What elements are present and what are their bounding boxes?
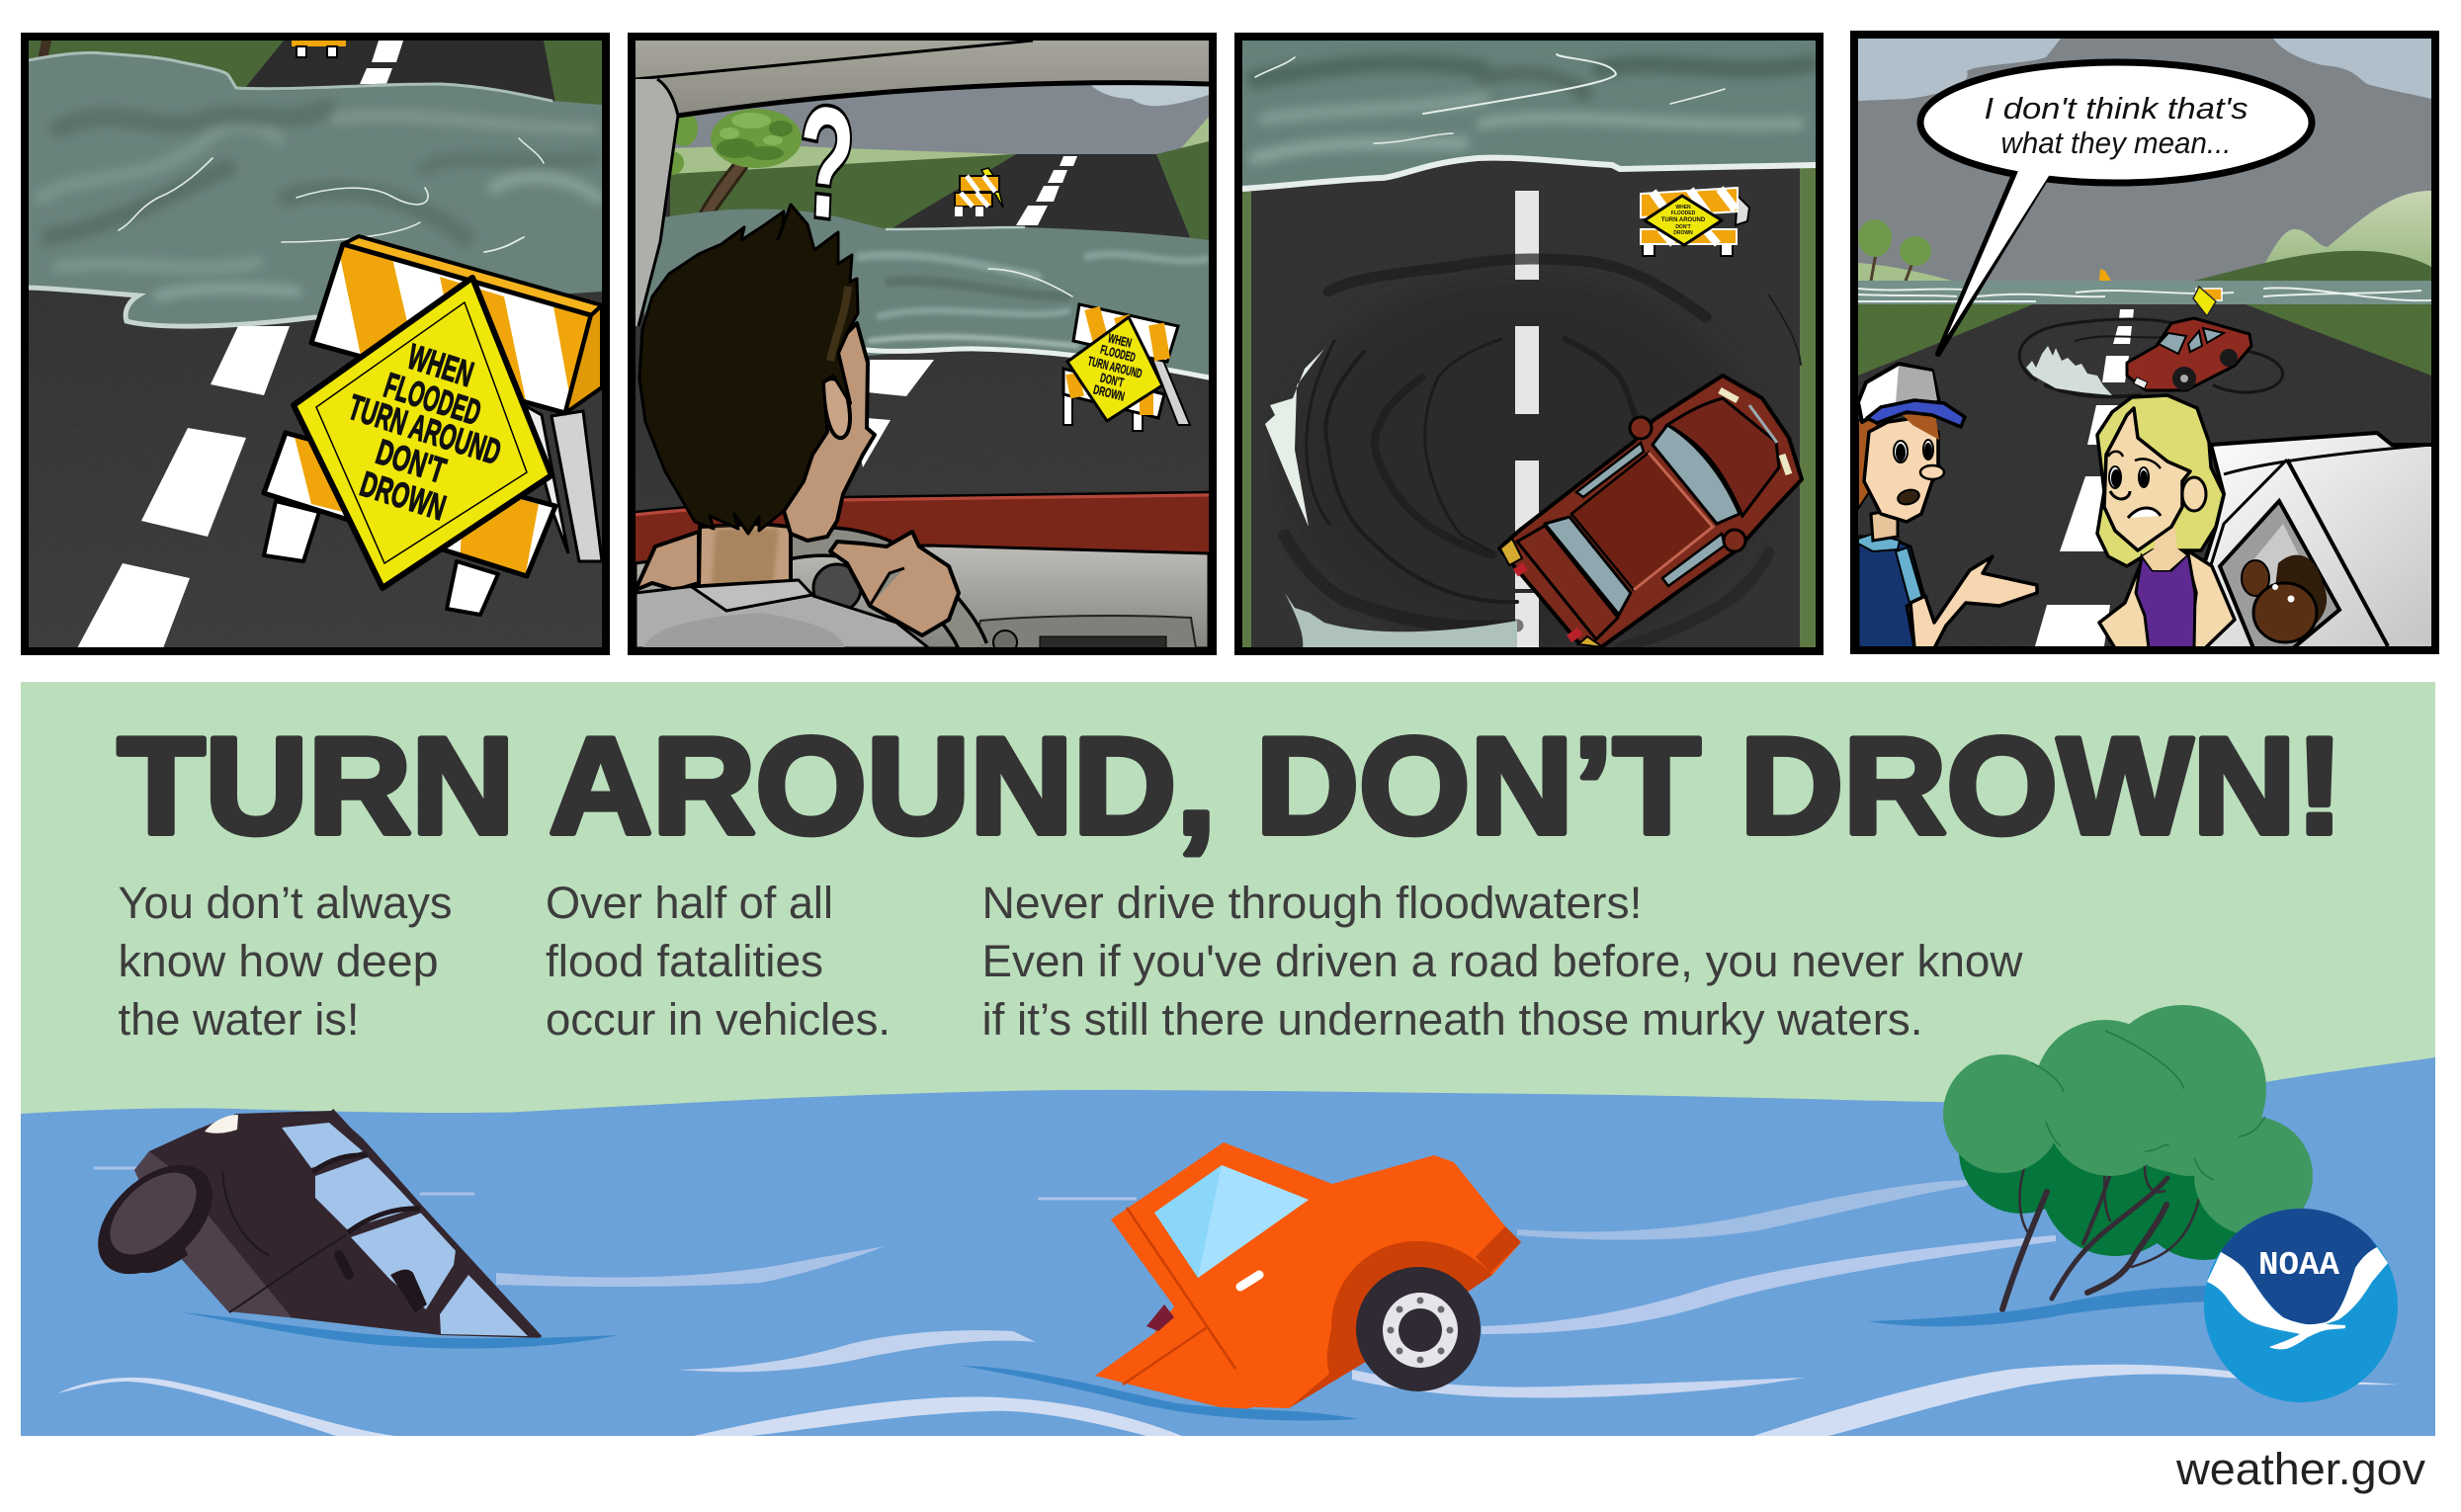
text block: fatalities bbox=[546, 878, 891, 1045]
boy neck bbox=[1871, 509, 1898, 541]
blonde woman bbox=[2097, 395, 2235, 648]
small barricade with sign bbox=[1063, 304, 1190, 431]
barricade far with sign: FLOODED bbox=[1671, 210, 1696, 216]
waterline: orange car bbox=[962, 1366, 1359, 1420]
text block: fatalities: occur in vehicles. bbox=[546, 994, 891, 1045]
barricade far with sign: DROWN bbox=[1673, 230, 1693, 236]
yellow warning sign with text: TURN AROUND bbox=[344, 386, 506, 472]
steering wheel bbox=[793, 526, 988, 647]
tree dark foliage bbox=[1959, 1089, 2278, 1260]
barricade far with sign bbox=[1641, 188, 1749, 256]
tree trunks bbox=[2002, 1165, 2202, 1309]
small barricade with sign: WHEN bbox=[1107, 330, 1134, 351]
kid hair bbox=[2273, 555, 2327, 632]
text block: depth: You don’t always bbox=[119, 878, 453, 928]
windshield bbox=[1653, 425, 1740, 524]
woman arms bbox=[2099, 553, 2160, 648]
mirrors bbox=[1630, 417, 1652, 439]
text block: never drive bbox=[982, 878, 2023, 1045]
text block: never drive: Even if you've driven a road before, you never know bbox=[982, 936, 2023, 986]
speech bubble tail and ellipse with text: I don't think that's bbox=[1985, 91, 2248, 126]
driver hands bbox=[636, 532, 959, 635]
side windows bbox=[1576, 443, 1644, 497]
kid arm bbox=[2242, 560, 2269, 596]
roof bbox=[1571, 453, 1713, 590]
small barricade with sign: DON'T bbox=[1099, 370, 1126, 390]
panel 2: driver looking at flood through windshield bbox=[628, 33, 1217, 655]
barricade lower board bbox=[264, 425, 555, 583]
yellow warning sign with text: DON'T bbox=[372, 431, 451, 491]
far road bbox=[891, 154, 1190, 237]
far barricade bbox=[292, 41, 346, 57]
yellow warning sign with text: WHEN bbox=[403, 336, 478, 394]
driver neck bbox=[699, 524, 791, 588]
car ceiling and roof frame bbox=[636, 41, 1209, 326]
grass bbox=[1858, 296, 2431, 415]
NOAA logo bbox=[2204, 1186, 2398, 1402]
boy shirt bbox=[1858, 537, 1925, 648]
dark spin area bbox=[1280, 272, 1764, 657]
sinking black car bbox=[77, 1111, 540, 1338]
driver shirt bbox=[636, 580, 929, 648]
sky through windshield bbox=[674, 85, 1209, 175]
dashboard top in red bbox=[636, 492, 1209, 561]
far barricade bbox=[955, 168, 1003, 216]
skid marks bbox=[2019, 319, 2283, 396]
panel 1: barricade sign at flooded road bbox=[21, 33, 610, 655]
woman hair bbox=[2097, 395, 2224, 566]
woman neck bbox=[2143, 524, 2186, 570]
boy cap bbox=[1858, 364, 1939, 422]
boy arm and hand bbox=[1910, 556, 2037, 648]
woman face bbox=[2104, 408, 2190, 550]
water splash bottom bbox=[1285, 593, 1517, 648]
orange car bbox=[1095, 1142, 1521, 1411]
water swirls bbox=[40, 109, 598, 296]
far red car bbox=[2127, 318, 2251, 390]
text block: never drive: Never drive through floodwaters! bbox=[982, 878, 1643, 928]
hood bbox=[1667, 398, 1779, 516]
barricade side supports bbox=[552, 411, 602, 561]
dashboard lower bbox=[636, 546, 1209, 654]
title: TURN AROUND, DON’T DROWN! bbox=[118, 710, 2343, 863]
clouds bbox=[1858, 39, 2431, 101]
foam highlights bbox=[29, 52, 552, 326]
tree light foliage bbox=[1943, 1005, 2313, 1235]
red car top view bbox=[1499, 376, 1802, 647]
speech bubble tail and ellipse with text bbox=[1920, 62, 2312, 354]
car windows bbox=[282, 1123, 363, 1168]
NOAA logo: NOAA bbox=[2258, 1247, 2339, 1284]
grass bbox=[670, 141, 1209, 242]
boy in cap bbox=[1858, 364, 2037, 648]
distant trees bbox=[1858, 219, 1931, 289]
text block: never drive: if it’s still there underneath those murky waters. bbox=[982, 994, 1923, 1045]
panel: green banner with headline and water scene bbox=[21, 682, 2435, 1436]
road lane dashes bbox=[211, 326, 290, 395]
text block: depth bbox=[119, 878, 453, 1045]
question mark: ? bbox=[796, 71, 858, 254]
distant hills bbox=[2253, 191, 2431, 281]
speech bubble tail and ellipse with text: what they mean... bbox=[2000, 126, 2232, 160]
small barricade with sign: FLOODED bbox=[1099, 342, 1137, 365]
tree bbox=[671, 109, 802, 212]
yellow warning sign with text: DROWN bbox=[356, 463, 451, 528]
tree trunk at far left bbox=[38, 41, 51, 57]
small barricade with sign: TURN AROUND bbox=[1086, 353, 1144, 381]
boy hair bbox=[1858, 420, 1878, 509]
cloud bbox=[1091, 85, 1209, 107]
barricade upper board bbox=[311, 236, 603, 415]
barricade legs bbox=[264, 501, 319, 561]
floodwater bbox=[29, 52, 602, 328]
white car with kid at window bbox=[2194, 433, 2433, 648]
door handle bbox=[1240, 1275, 1259, 1287]
far lane dashes bbox=[1016, 156, 1077, 225]
center lane dashes bbox=[1515, 191, 1539, 648]
far road with lane dashes bbox=[372, 41, 403, 62]
waves bbox=[57, 1168, 2400, 1436]
kid face bbox=[2253, 583, 2317, 642]
boy face bbox=[1864, 418, 1942, 522]
yellow warning sign with text: FLOODED bbox=[380, 365, 486, 433]
driver hair bbox=[639, 205, 858, 534]
panel 4: bystanders watching the car bbox=[1850, 31, 2439, 654]
far barricade bbox=[2099, 269, 2111, 281]
hills bbox=[670, 117, 1209, 178]
spare tire bbox=[77, 1143, 233, 1296]
text block: fatalities: flood fatalities bbox=[546, 936, 823, 986]
rear window bbox=[1545, 517, 1631, 615]
small barricade with sign: DROWN bbox=[1092, 381, 1126, 404]
barricade far with sign: WHEN bbox=[1675, 205, 1691, 210]
text block: depth: the water is! bbox=[119, 994, 360, 1045]
lights bbox=[1720, 390, 1789, 474]
waterline: tree bbox=[1868, 1285, 2234, 1326]
trunk deck bbox=[1517, 526, 1618, 639]
text block: depth: know how deep bbox=[119, 936, 439, 986]
woman top bbox=[2136, 553, 2195, 648]
barricade far with sign: TURN AROUND bbox=[1661, 217, 1706, 223]
website credit: weather.gov bbox=[2175, 1444, 2426, 1494]
road bbox=[1858, 304, 2431, 646]
driver ear bbox=[823, 378, 850, 438]
lane dashes near bbox=[867, 360, 934, 396]
barricade far with sign: DON'T bbox=[1675, 224, 1691, 230]
grass beyond the water bbox=[29, 41, 602, 105]
small barricade sign bbox=[2193, 287, 2222, 316]
skid mark rings bbox=[1285, 259, 1801, 648]
bent tree in flood bbox=[1943, 1005, 2313, 1309]
wheel arch bbox=[1289, 1241, 1492, 1408]
driver face side bbox=[784, 323, 875, 541]
floodwater band bbox=[1858, 281, 2431, 304]
floodwater bbox=[1242, 41, 1816, 189]
lane dashes bbox=[2035, 309, 2134, 646]
car window bbox=[1154, 1165, 1309, 1278]
road edge grass strips bbox=[1242, 163, 1816, 647]
panel 3: top-down view of car spinning out bbox=[1234, 33, 1824, 657]
rear bumper bbox=[1476, 1226, 1521, 1273]
splash bbox=[2026, 346, 2112, 395]
water splash left bbox=[1265, 349, 1324, 527]
text block: fatalities: Over half of all bbox=[546, 878, 833, 928]
wheel bbox=[1356, 1267, 1481, 1391]
yellow warning sign with text bbox=[294, 278, 552, 588]
floodwater bbox=[644, 210, 1209, 376]
mirror bbox=[1146, 1304, 1174, 1331]
floodwater bbox=[21, 1057, 2435, 1436]
waterline: black car bbox=[181, 1312, 619, 1349]
